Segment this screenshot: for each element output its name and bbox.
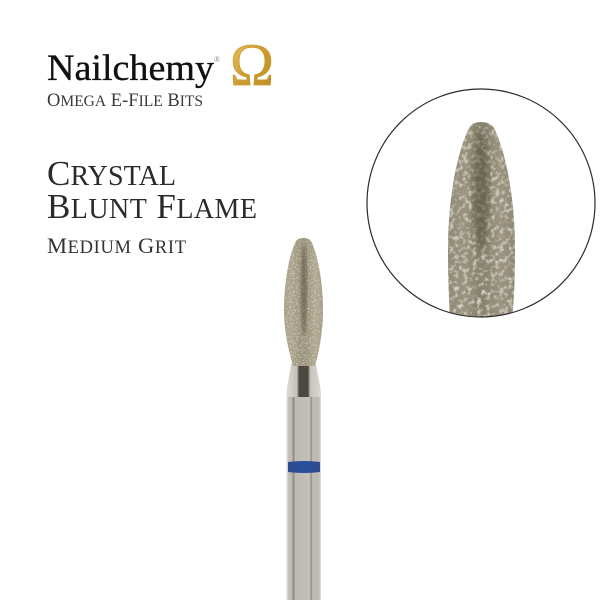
magnified detail circle [367,89,595,320]
subtitle: Omega E-File Bits: OMEGA E-FILE BITS [47,91,203,111]
circle outline [367,89,595,317]
product title [47,154,257,226]
product title: BLUNT FLAME [47,187,257,226]
magnified head [448,122,515,320]
blue grit band [288,461,320,473]
diamond flame head [284,238,323,366]
brand logo: Nailchemy wordmark: ® [214,55,220,64]
bit neck [286,364,321,397]
grit label: MEDIUM GRIT [47,233,186,258]
icon: gold omega: Ω [230,32,274,98]
bit shaft [286,396,321,600]
brand logo: Nailchemy wordmark: Nailchemy [47,48,215,89]
product title: CRYSTAL [47,154,176,193]
e-file bit illustration [284,238,323,600]
